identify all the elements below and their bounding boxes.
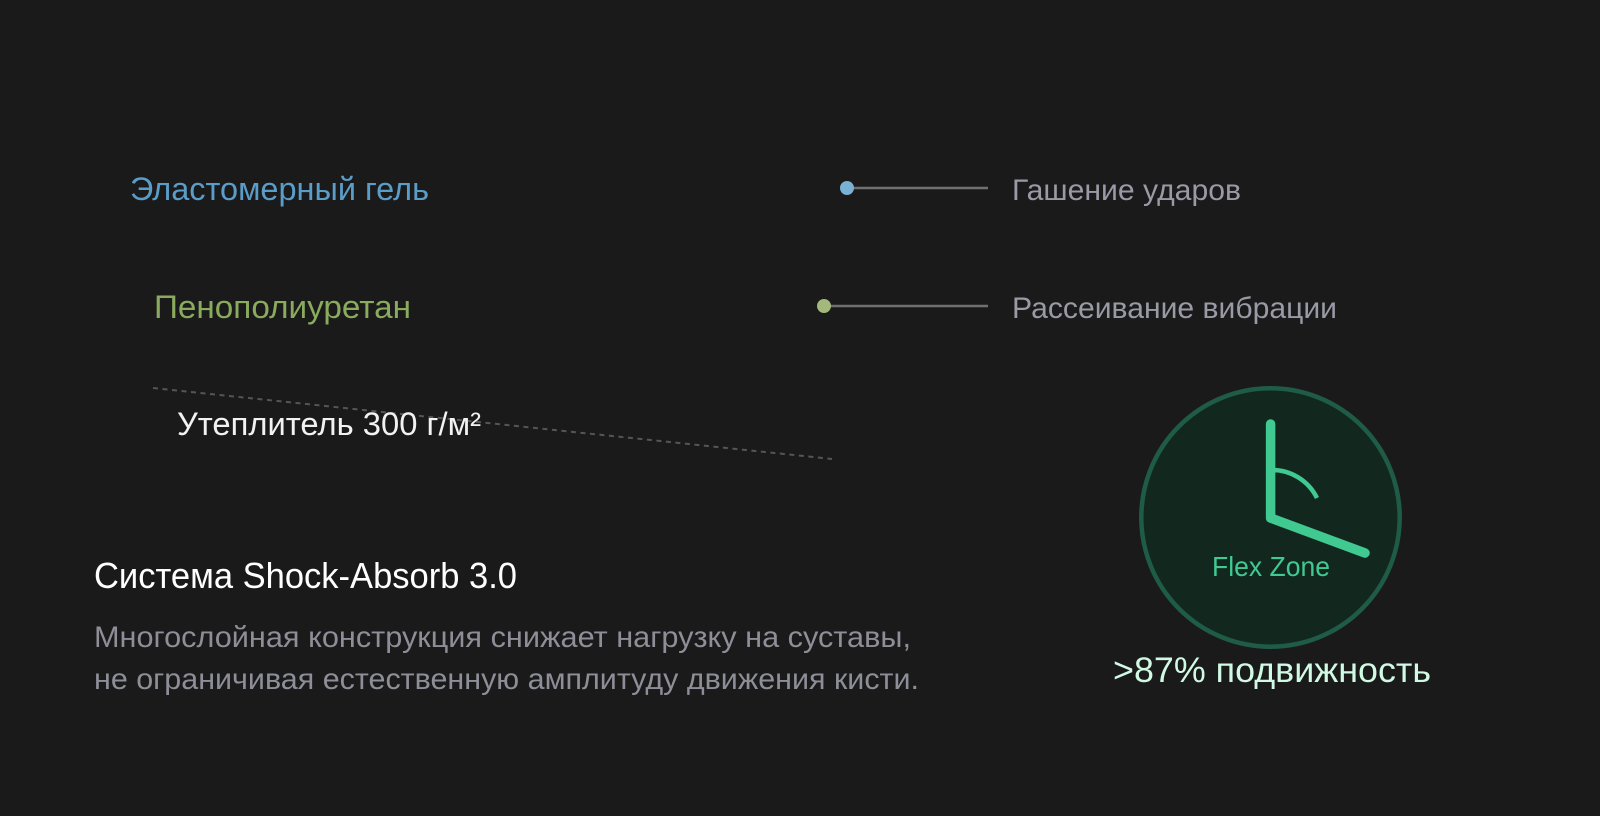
flex zone dial: [1141, 388, 1400, 647]
summary block: [94, 555, 919, 696]
dot: green: [817, 299, 831, 313]
callout text: Гашение ударов: [1012, 174, 1241, 207]
dial circle: [1141, 388, 1400, 647]
mobility stat: >87% подвижность: [1113, 651, 1431, 690]
layer labels: material stack: [130, 171, 832, 459]
connector line: [847, 187, 988, 189]
description line 2: не ограничивая естественную амплитуду движения кисти.: [94, 663, 919, 696]
joint angle hands: [1271, 424, 1365, 553]
layer label: elastomer gel: Эластомерный гель: [130, 171, 429, 207]
callout text: Рассеивание вибрации: [1012, 292, 1337, 325]
connector line: [824, 305, 988, 307]
callout: vibration dissipation: [817, 292, 1337, 325]
dashed divider line: [153, 388, 832, 459]
layer label: polyurethane foam: Пенополиуретан: [154, 289, 411, 325]
callout: shock damping: [840, 174, 1241, 207]
dot: blue: [840, 181, 854, 195]
flex arc: [1270, 470, 1317, 498]
description line 1: Многослойная конструкция снижает нагрузку на суставы,: [94, 621, 911, 654]
dial label: Flex Zone: [1212, 551, 1330, 582]
layer label: insulation: Утеплитель 300 г/м²: [177, 406, 481, 442]
heading: Система Shock-Absorb 3.0: [94, 555, 517, 596]
